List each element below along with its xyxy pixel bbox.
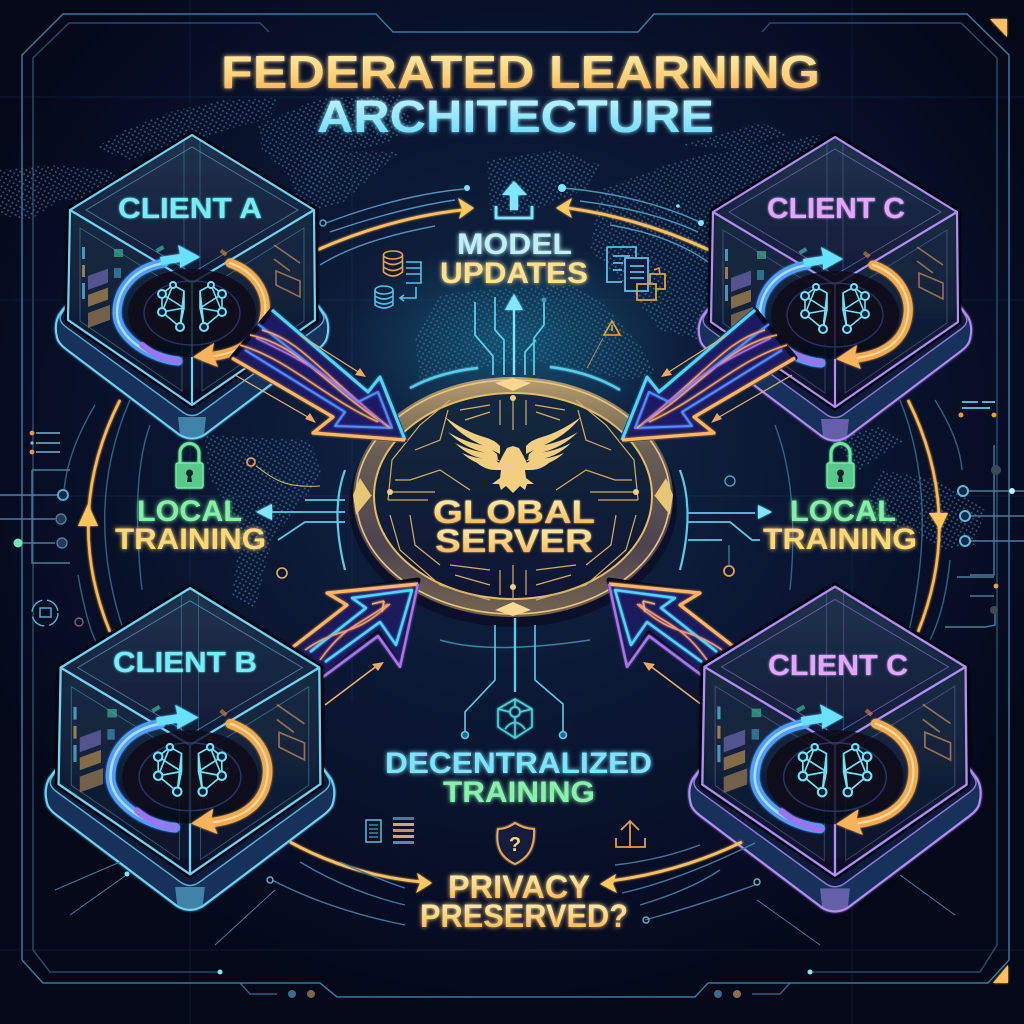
arrow: top right gold — [556, 198, 572, 218]
label: global server: SERVER — [435, 523, 593, 559]
title — [221, 46, 820, 142]
thin side rings — [64, 400, 962, 645]
label: local training right: TRAINING — [763, 523, 917, 556]
world map dots — [0, 95, 985, 610]
icon: upload small — [616, 821, 645, 848]
big arrow: client B to server — [293, 580, 418, 705]
icon: hexagon network — [498, 699, 532, 738]
client A cube — [56, 135, 328, 438]
arrow: bottom right gold — [600, 874, 617, 893]
icon: eagle — [445, 417, 581, 493]
client A cube: CLIENT A — [118, 193, 262, 225]
diamond accents — [353, 478, 673, 515]
client B cube: CLIENT B — [113, 647, 257, 679]
icon: upload top — [496, 181, 532, 218]
icon: shield question: ? — [509, 834, 521, 856]
up arrow and circuit traces to server — [410, 297, 620, 390]
client C lower cube — [689, 587, 981, 911]
circuit pattern — [388, 398, 638, 600]
arrow: right ring down — [929, 513, 948, 530]
title: ARCHITECTURE — [317, 91, 714, 142]
label: local training right — [763, 495, 917, 556]
icon: document list — [366, 817, 414, 844]
big arrow: client C to server — [622, 310, 795, 440]
label: privacy preserved — [420, 869, 628, 934]
arrow: to left training — [256, 504, 272, 520]
label: model updates: MODEL — [457, 228, 572, 261]
label: local training left: LOCAL — [137, 495, 242, 528]
label: decentralized training — [385, 747, 652, 809]
right tech decoration — [945, 402, 1024, 627]
icon: databases — [375, 251, 421, 308]
label: model updates: UPDATES — [440, 257, 588, 290]
small nodes — [247, 458, 735, 578]
arrow: to right training — [758, 505, 772, 519]
client B cube — [46, 588, 334, 910]
arrow: bottom left gold — [416, 873, 432, 893]
label: privacy preserved: PRIVACY — [448, 869, 590, 905]
bottom arcs — [55, 842, 955, 945]
label: global server — [433, 494, 595, 559]
title: FEDERATED LEARNING — [221, 46, 820, 98]
icon: warning triangle — [587, 321, 620, 368]
arrow: left ring up — [78, 504, 98, 526]
label: global server: GLOBAL — [433, 494, 595, 530]
icon: green lock left — [176, 444, 203, 488]
label: decentralized training: TRAINING — [443, 776, 595, 809]
lower circuit traces — [440, 618, 590, 738]
icon: documents — [607, 247, 665, 300]
left orange arc — [88, 400, 120, 632]
label: local training right: LOCAL — [790, 495, 896, 528]
side circuit lines — [270, 470, 760, 570]
icon: shield question — [497, 823, 534, 864]
client C lower cube: CLIENT C — [768, 650, 908, 682]
global server — [349, 377, 677, 627]
client C upper cube — [699, 137, 971, 440]
big arrow: client A to server — [232, 310, 405, 440]
arrow: top left gold — [458, 198, 474, 219]
label: model updates — [440, 228, 588, 290]
top arcs — [317, 184, 709, 265]
arrow: up to model updates — [505, 294, 523, 310]
icon: green lock right — [827, 444, 854, 488]
frame accents — [218, 19, 1008, 998]
left tech decoration — [0, 431, 83, 626]
label: local training left — [115, 495, 266, 556]
orbit rings — [64, 400, 962, 645]
label: privacy preserved: PRESERVED? — [420, 898, 628, 934]
right orange arc — [908, 400, 939, 632]
glow behind server — [342, 240, 682, 440]
big arrow: client C lower to server — [609, 580, 734, 705]
client C upper cube: CLIENT C — [767, 193, 905, 225]
label: decentralized training: DECENTRALIZED — [385, 747, 652, 780]
label: local training left: TRAINING — [115, 523, 266, 556]
